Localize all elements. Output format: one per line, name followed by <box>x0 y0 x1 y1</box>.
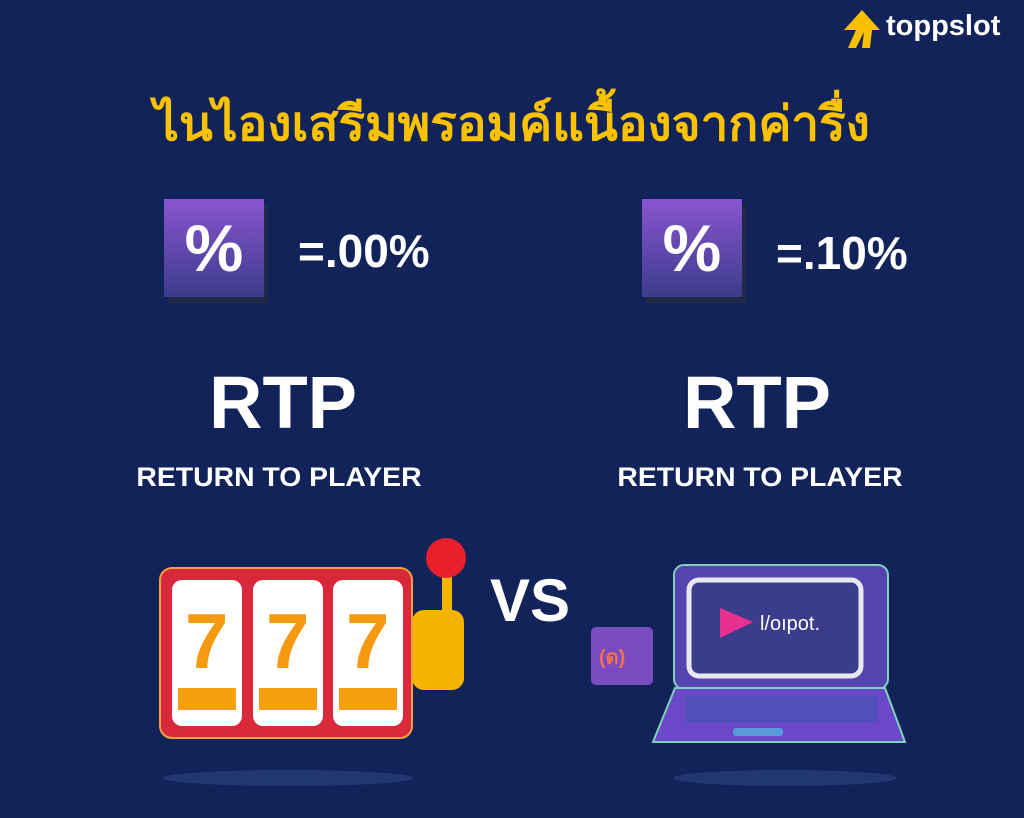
RTP right: RTP <box>683 361 831 444</box>
icon: laptop: l/oıpot. <box>760 613 820 635</box>
subtitle left: RETURN TO PLAYER <box>136 462 422 492</box>
percent icon right: % <box>663 211 721 285</box>
percent icon right <box>642 199 742 297</box>
icon: laptop: (ด) <box>599 647 625 669</box>
percent icon left: % <box>185 211 243 285</box>
icon: laptop <box>591 564 906 786</box>
title: ไนไองเสรีมพรอมค์แนื้องจากค่ารื่ง <box>154 98 870 151</box>
icon: slot machine: 7 <box>266 597 309 685</box>
icon: slot machine <box>159 538 466 786</box>
percent icon left <box>164 199 264 297</box>
subtitle right: RETURN TO PLAYER <box>617 462 903 492</box>
icon: slot machine: 7 <box>346 597 389 685</box>
VS: VS <box>490 567 570 634</box>
value right: =.10% <box>776 227 908 279</box>
value left: =.00% <box>298 225 430 277</box>
icon: slot machine: 7 <box>185 597 228 685</box>
logo: toppslot <box>886 10 1000 42</box>
RTP left: RTP <box>209 361 357 444</box>
logo <box>844 10 1000 48</box>
